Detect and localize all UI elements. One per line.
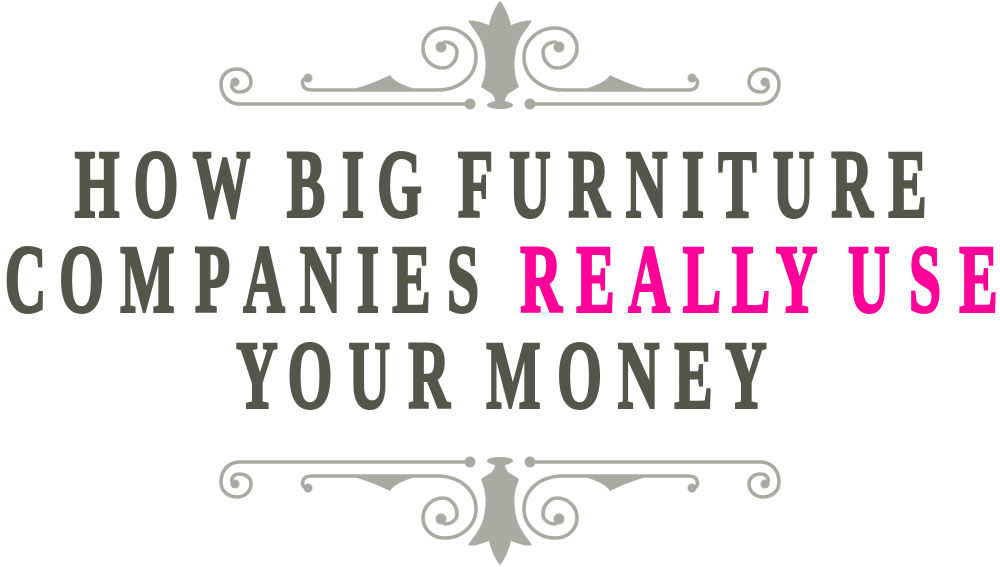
title [5, 132, 998, 429]
top ornament [221, 1, 779, 110]
title line 1: HOW BIG FURNITURE [75, 132, 927, 238]
bottom ornament [221, 456, 779, 565]
title line 3: YOUR MONEY [236, 323, 767, 429]
title line 2 with pink highlight: COMPANIES REALLY USE [5, 227, 998, 333]
